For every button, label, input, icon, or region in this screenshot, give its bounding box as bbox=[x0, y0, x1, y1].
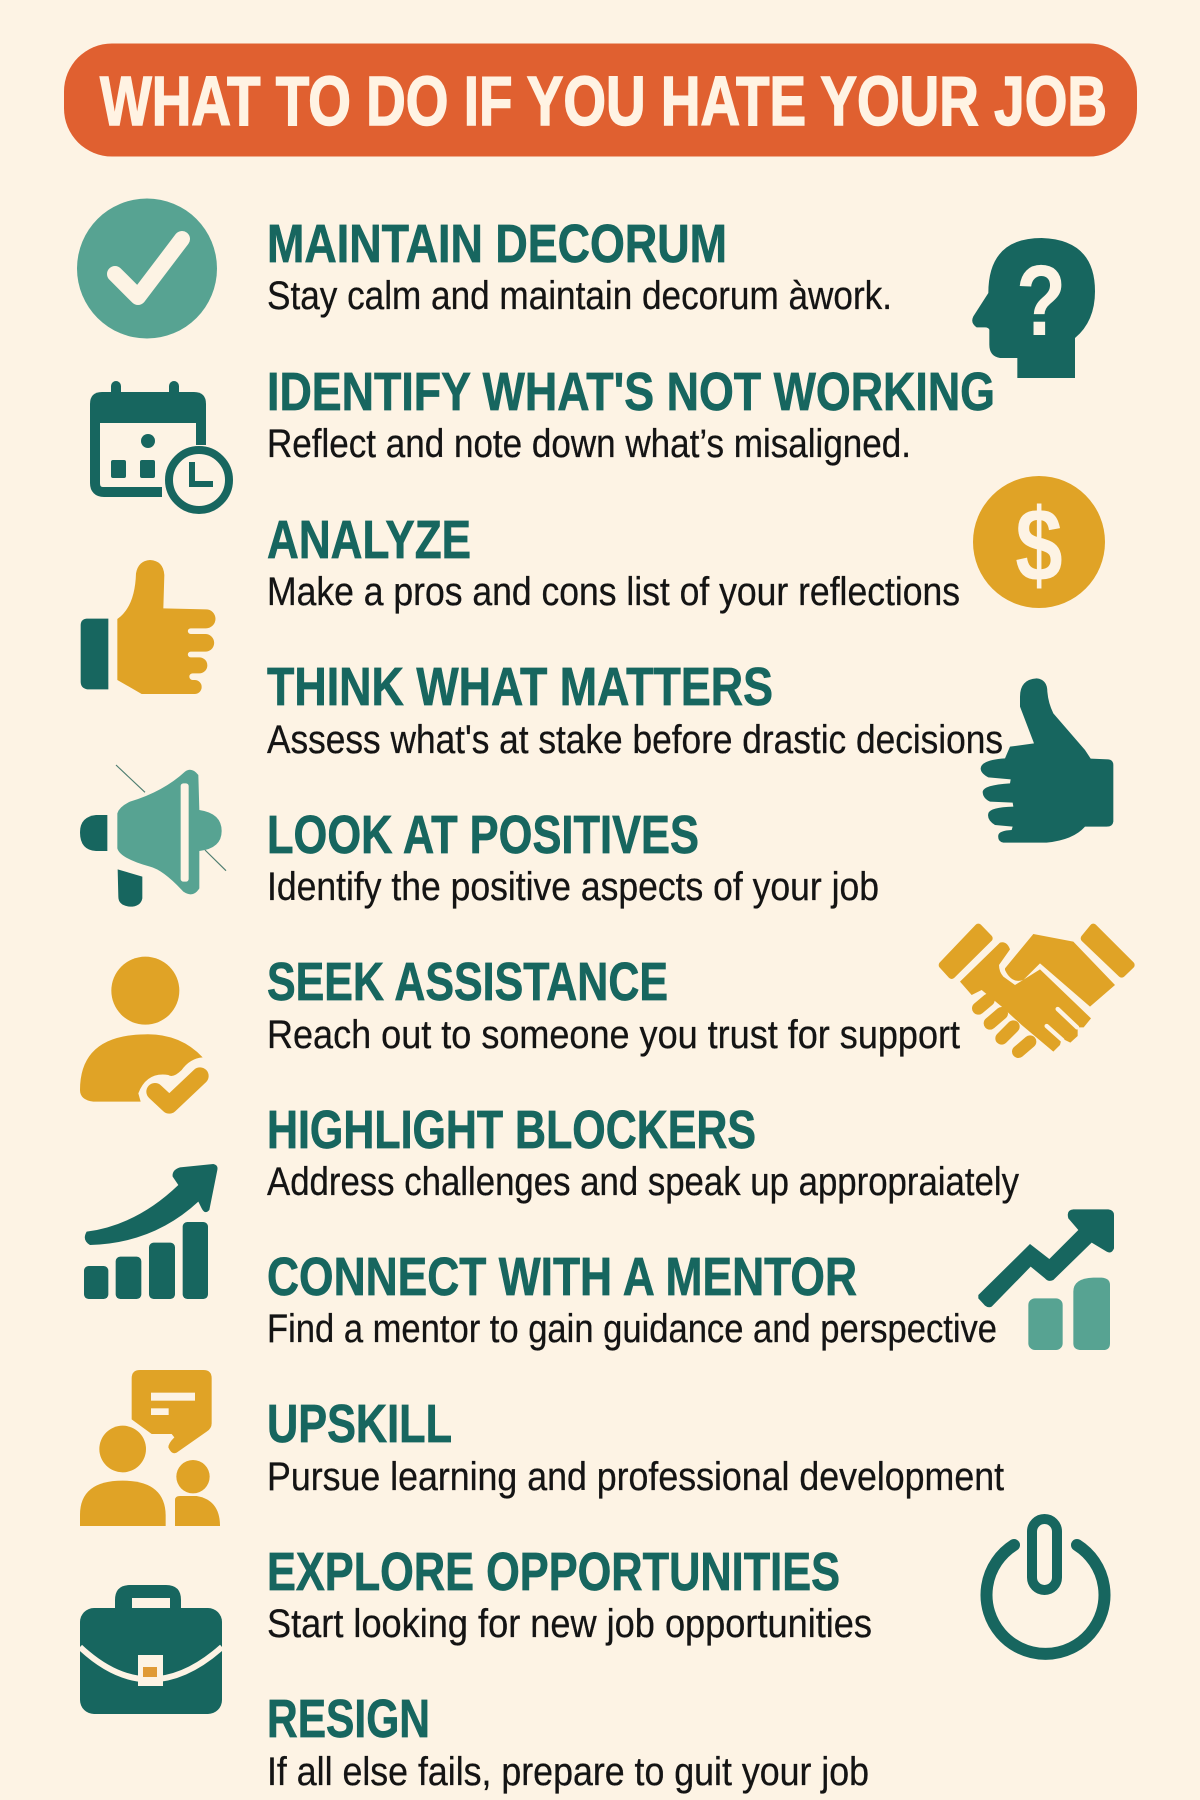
text: highlight blockers description: Address challenges and speak up appropraiately bbox=[267, 1160, 1019, 1204]
icon: people with speech bubble bbox=[80, 1370, 220, 1526]
icon: growth arrow with bars bbox=[978, 1209, 1114, 1350]
text: analyze description: Make a pros and cons list of your reflections bbox=[267, 570, 960, 614]
icon: person with check bbox=[80, 957, 203, 1105]
icon: teal thumbs up bbox=[981, 678, 1113, 843]
icon: dollar coin bbox=[973, 476, 1105, 608]
icon: megaphone bbox=[80, 765, 226, 907]
icon: head with question mark: ? bbox=[1016, 245, 1066, 357]
text: connect with a mentor description: Find a mentor to gain guidance and perspective bbox=[267, 1307, 997, 1351]
heading: resign: RESIGN bbox=[267, 1689, 430, 1749]
heading: upskill: UPSKILL bbox=[267, 1394, 452, 1454]
icon: handshake bbox=[942, 927, 1131, 1052]
heading: maintain decorum: MAINTAIN DECORUM bbox=[267, 214, 727, 274]
text: think what matters description: Assess what's at stake before drastic decisions bbox=[267, 718, 1003, 762]
heading: connect with a mentor: CONNECT WITH A MENTOR bbox=[267, 1247, 857, 1307]
text: upskill description: Pursue learning and professional development bbox=[267, 1455, 1004, 1499]
icon: calendar with clock bbox=[90, 381, 229, 510]
icon: gold thumbs up bbox=[81, 560, 215, 694]
heading: look at positives: LOOK AT POSITIVES bbox=[267, 805, 699, 865]
text: look at positives description: Identify the positive aspects of your job bbox=[267, 865, 879, 909]
icon: head with question mark bbox=[972, 238, 1095, 378]
icon: power symbol bbox=[987, 1519, 1105, 1654]
text: maintain decorum description: Stay calm and maintain decorum àwork. bbox=[267, 274, 892, 318]
heading: seek assistance: SEEK ASSISTANCE bbox=[267, 952, 668, 1012]
icon: check mark circle bbox=[77, 198, 217, 338]
title banner bbox=[64, 44, 1137, 156]
heading: identify what's not working: IDENTIFY WHAT'S NOT WORKING bbox=[267, 362, 995, 422]
text: seek assistance description: Reach out to someone you trust for support bbox=[267, 1013, 960, 1057]
text: explore opportunities description: Start looking for new job opportunities bbox=[267, 1602, 872, 1646]
text: resign description: If all else fails, prepare to guit your job bbox=[267, 1750, 869, 1794]
heading: explore opportunities: EXPLORE OPPORTUNITIES bbox=[267, 1542, 840, 1602]
icon: rising bar chart with arrow bbox=[84, 1164, 217, 1299]
heading: think what matters: THINK WHAT MATTERS bbox=[267, 657, 773, 717]
heading: highlight blockers: HIGHLIGHT BLOCKERS bbox=[267, 1100, 756, 1160]
heading: analyze: ANALYZE bbox=[267, 510, 471, 570]
text: identify description: Reflect and note down what’s misaligned. bbox=[267, 422, 911, 466]
icon: briefcase bbox=[80, 1585, 222, 1714]
icon: dollar coin: $ bbox=[1015, 488, 1063, 604]
